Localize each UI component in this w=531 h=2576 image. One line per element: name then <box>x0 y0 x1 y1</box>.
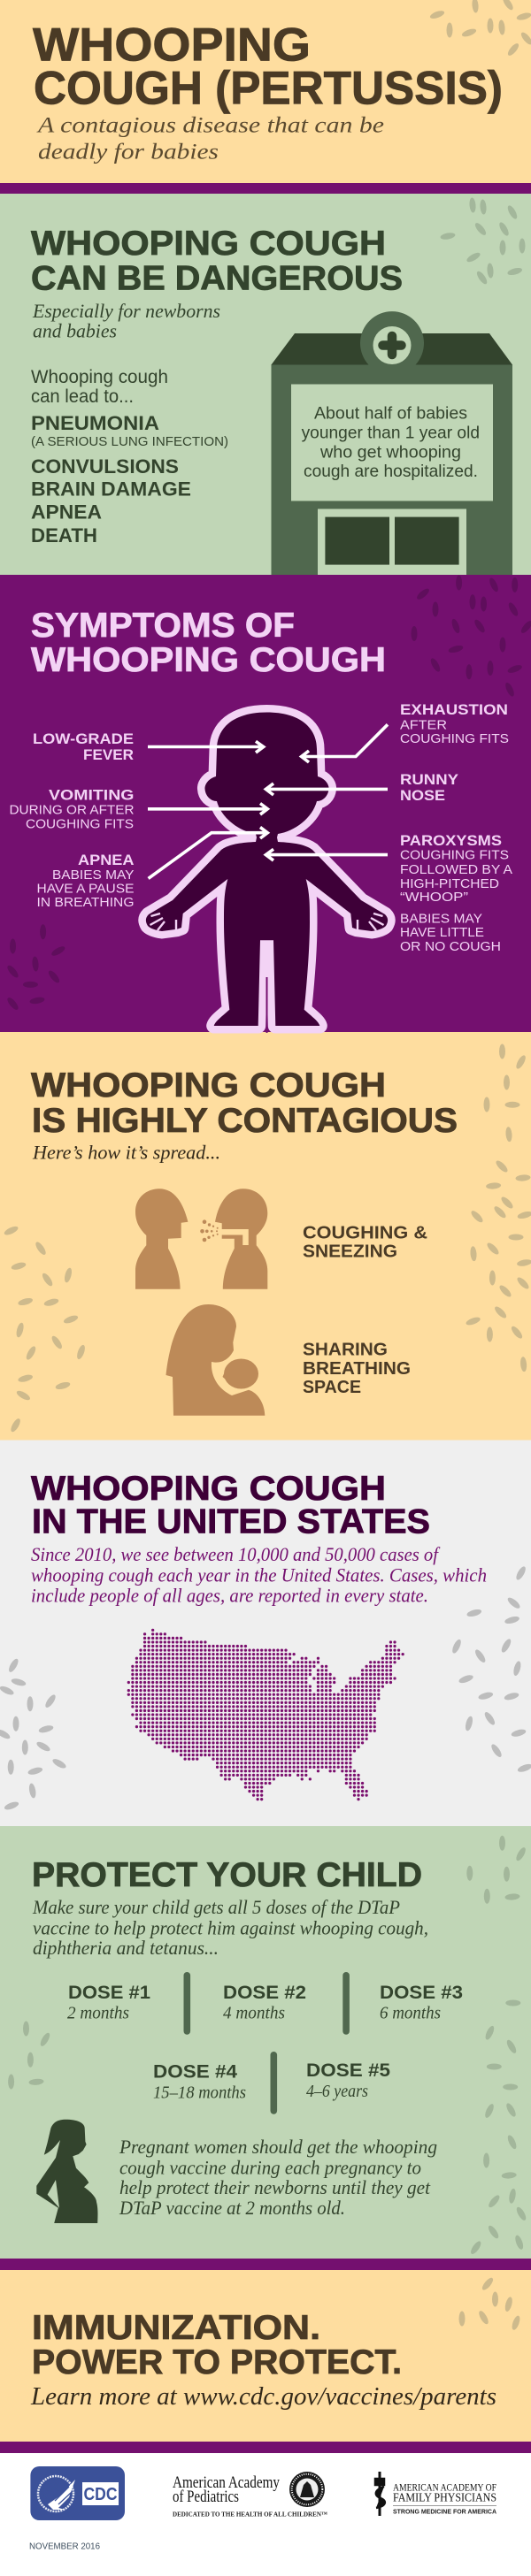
label: coughing and sneezing: COUGHING & <box>303 1223 427 1243</box>
divider band <box>0 2259 531 2270</box>
logo: American Academy of Family Physicians: STRONG MEDICINE FOR AMERICA <box>393 2508 497 2516</box>
heading <box>31 1066 458 1140</box>
callout: hospitalized: cough are hospitalized. <box>304 462 478 481</box>
label: vomiting: VOMITING <box>49 787 135 803</box>
heading: PROTECT YOUR CHILD <box>32 1856 422 1894</box>
label: paroxysms: COUGHING FITS <box>400 849 509 863</box>
heading: CAN BE DANGEROUS <box>31 260 403 297</box>
case statistics text: include people of all ages, are reported in every state. <box>31 1585 428 1607</box>
dose 4 <box>153 2060 246 2103</box>
title: COUGH (PERTUSSIS) <box>34 62 503 114</box>
dose 5: DOSE #5 <box>306 2060 390 2081</box>
dose 3: 6 months <box>380 2004 441 2023</box>
complications list: can lead to... <box>31 386 134 407</box>
dose 5: 4–6 years <box>306 2082 368 2101</box>
pregnancy text <box>119 2136 437 2219</box>
label: runny nose <box>400 772 458 804</box>
dose 2: DOSE #2 <box>223 1982 306 2003</box>
intro text: Make sure your child gets all 5 doses of the DTaP <box>32 1896 400 1918</box>
callout: hospitalized: About half of babies <box>314 403 467 423</box>
complications list: (A SERIOUS LUNG INFECTION) <box>31 434 228 449</box>
divider band <box>0 2442 531 2453</box>
label: paroxysms: HIGH-PITCHED <box>400 877 499 891</box>
label: apnea: IN BREATHING <box>37 896 135 910</box>
panel: symptoms <box>0 575 531 1032</box>
dose 1 <box>67 1982 150 2023</box>
date: NOVEMBER 2016 <box>29 2542 100 2552</box>
arrow: paroxysms <box>266 849 388 860</box>
dose 5 <box>306 2060 390 2101</box>
logo: American Academy of Pediatrics: of Pediatrics <box>173 2488 239 2506</box>
case statistics text: whooping cough each year in the United States. Cases, which <box>31 1563 487 1586</box>
icon: mother and baby <box>166 1304 265 1416</box>
dose 4: 15–18 months <box>153 2083 246 2103</box>
logo: American Academy of Family Physicians: FAMILY PHYSICIANS <box>393 2492 496 2505</box>
label: low-grade fever: FEVER <box>83 747 134 763</box>
callout: hospitalized: who get whooping <box>319 442 461 462</box>
label: coughing and sneezing <box>303 1223 427 1262</box>
logo: American Academy of Pediatrics: American Academy <box>173 2473 280 2492</box>
slogan <box>32 2309 402 2381</box>
label: little or no cough: HAVE LITTLE <box>400 926 484 940</box>
dose 3 <box>380 1982 463 2023</box>
complications list: Whooping cough <box>31 367 168 387</box>
dose 2 <box>223 1982 306 2023</box>
panel: protect your child <box>0 1826 531 2259</box>
logo: American Academy of Family Physicians <box>375 2472 497 2516</box>
arrow: fever <box>148 741 264 753</box>
icon: hospital <box>271 311 512 575</box>
label: exhaustion: AFTER <box>400 718 447 732</box>
link text: Learn more at www.cdc.gov/vaccines/parents <box>30 2383 496 2411</box>
dose 3: DOSE #3 <box>380 1982 463 2003</box>
label: exhaustion: EXHAUSTION <box>400 702 508 718</box>
logo: CDC and HHS <box>30 2466 125 2520</box>
label: paroxysms: FOLLOWED BY A <box>400 863 512 877</box>
icon: two people coughing <box>135 1189 267 1289</box>
label: paroxysms: “WHOOP” <box>400 891 468 905</box>
heading: IS HIGHLY CONTAGIOUS <box>32 1102 458 1140</box>
title: WHOOPING <box>33 19 311 71</box>
pregnancy text: DTaP vaccine at 2 months old. <box>119 2197 345 2219</box>
subheading: Especially for newborns <box>32 300 220 322</box>
heading <box>31 225 403 297</box>
label: little or no cough: BABIES MAY <box>400 912 482 926</box>
logo: American Academy of Family Physicians: AMERICAN ACADEMY OF <box>393 2481 496 2494</box>
label: runny nose: RUNNY <box>400 772 458 788</box>
panel: can be dangerous <box>0 194 531 575</box>
label: sharing breathing space <box>303 1340 411 1397</box>
subtitle <box>36 113 384 164</box>
heading: WHOOPING COUGH <box>31 225 386 263</box>
logo: CDC and HHS: CDC <box>83 2485 117 2504</box>
heading <box>31 607 386 679</box>
subheading: and babies <box>33 320 117 341</box>
label: vomiting: DURING OR AFTER <box>9 804 135 818</box>
label: apnea: APNEA <box>78 852 135 868</box>
dose 1: 2 months <box>67 2004 129 2023</box>
label: vomiting <box>9 787 135 832</box>
pregnancy text: cough vaccine during each pregnancy to <box>119 2156 421 2178</box>
label: little or no cough <box>400 912 501 954</box>
label: apnea: BABIES MAY <box>52 868 135 883</box>
complications list: BRAIN DAMAGE <box>31 478 191 501</box>
label: coughing and sneezing: SNEEZING <box>303 1242 397 1262</box>
label: exhaustion: COUGHING FITS <box>400 732 509 746</box>
label: apnea <box>37 852 135 910</box>
icon: pregnant woman <box>36 2120 97 2223</box>
subheading <box>32 300 220 341</box>
slogan: POWER TO PROTECT. <box>32 2343 402 2381</box>
divider band <box>0 183 531 194</box>
heading: SYMPTOMS OF <box>31 607 295 645</box>
dose 1: DOSE #1 <box>68 1982 150 2003</box>
complications list: DEATH <box>31 524 97 547</box>
heading: WHOOPING COUGH <box>31 641 386 679</box>
intro text: diphtheria and tetanus... <box>33 1937 219 1959</box>
label: exhaustion <box>400 702 509 746</box>
arrow: vomiting <box>148 803 267 814</box>
intro text: vaccine to help protect him against whooping cough, <box>33 1916 428 1938</box>
pregnancy text: Pregnant women should get the whooping <box>119 2136 437 2158</box>
title <box>33 19 503 114</box>
complications list: PNEUMONIA <box>31 412 159 434</box>
dose 4: DOSE #4 <box>153 2060 237 2082</box>
logo: American Academy of Pediatrics: DEDICATED TO THE HEALTH OF ALL CHILDREN™ <box>173 2511 327 2519</box>
logo: American Academy of Pediatrics <box>173 2472 327 2519</box>
slogan: IMMUNIZATION. <box>32 2309 320 2347</box>
label: little or no cough: OR NO COUGH <box>400 940 501 954</box>
dot map of the United States <box>128 1630 403 1800</box>
callout: hospitalized: younger than 1 year old <box>302 423 480 442</box>
label: sharing breathing space: BREATHING <box>303 1358 411 1379</box>
heading <box>31 1470 430 1540</box>
subtitle: A contagious disease that can be <box>36 113 384 137</box>
label: low-grade fever: LOW-GRADE <box>33 731 134 747</box>
label: paroxysms: PAROXYSMS <box>400 833 502 849</box>
arrow: runny nose <box>266 784 388 795</box>
label: vomiting: COUGHING FITS <box>26 818 134 832</box>
label: paroxysms <box>400 833 512 905</box>
body silhouette <box>146 713 388 1026</box>
case statistics text <box>31 1543 487 1607</box>
complications list <box>31 367 228 547</box>
callout: hospitalized <box>302 403 480 481</box>
label: runny nose: NOSE <box>400 788 445 804</box>
panel: united states <box>0 1440 531 1826</box>
label: apnea: HAVE A PAUSE <box>37 883 135 897</box>
dose schedule <box>67 1972 463 2114</box>
panel: header <box>0 0 531 183</box>
arrow: exhaustion <box>302 724 388 762</box>
complications list: CONVULSIONS <box>31 455 179 478</box>
heading: IN THE UNITED STATES <box>32 1502 430 1540</box>
label: sharing breathing space: SHARING <box>303 1340 388 1360</box>
subheading: Here’s how it’s spread... <box>32 1142 220 1164</box>
heading: WHOOPING COUGH <box>31 1066 386 1105</box>
figure: child with symptoms <box>9 702 512 1033</box>
panel: call to action <box>0 2270 531 2442</box>
intro text <box>32 1896 428 1959</box>
label: sharing breathing space: SPACE <box>303 1377 361 1397</box>
dose 2: 4 months <box>223 2004 285 2023</box>
subtitle: deadly for babies <box>38 140 219 164</box>
label: low-grade fever <box>33 731 134 763</box>
heading: WHOOPING COUGH <box>31 1470 386 1508</box>
panel: contagious <box>0 1032 531 1440</box>
arrow: apnea <box>149 828 267 878</box>
pregnancy text: help protect their newborns until they get <box>119 2176 431 2198</box>
complications list: APNEA <box>31 501 102 524</box>
case statistics text: Since 2010, we see between 10,000 and 50,000 cases of <box>31 1543 441 1565</box>
